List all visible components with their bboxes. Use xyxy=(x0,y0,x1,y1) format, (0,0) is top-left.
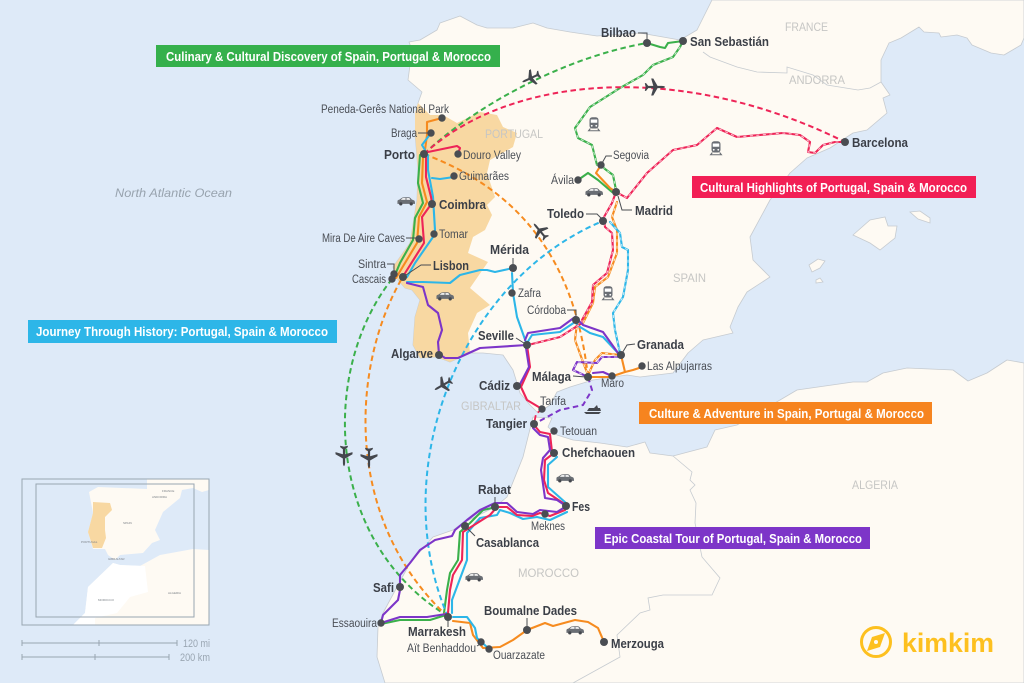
inset land xyxy=(88,479,209,560)
city labels: Fes xyxy=(572,499,590,514)
city labels: Merzouga xyxy=(611,636,665,651)
city labels: Mira De Aire Caves xyxy=(322,233,405,245)
city labels: Braga xyxy=(391,128,418,140)
city labels: Málaga xyxy=(532,369,572,384)
city labels: Porto xyxy=(384,147,415,162)
city labels: Lisbon xyxy=(433,258,469,273)
itinerary label: Cultural Highlights: Cultural Highlights of Portugal, Spain & Morocco xyxy=(700,180,967,195)
icon: planes xyxy=(336,67,665,468)
route: Epic Coastal Tour (purple) xyxy=(381,283,618,623)
country and sea labels xyxy=(115,20,898,580)
city labels: Madrid xyxy=(635,203,673,218)
itinerary label: Culture & Adventure: Culture & Adventure in Spain, Portugal & Morocco xyxy=(649,406,924,421)
city labels: Tarifa xyxy=(540,396,567,408)
inset labels: GIBRALTAR xyxy=(108,557,125,561)
inset Portugal xyxy=(88,502,112,548)
city labels: Douro Valley xyxy=(463,150,521,162)
inset labels: SPAIN xyxy=(123,521,132,525)
city labels: Algarve xyxy=(391,346,433,361)
land: Iberia and France xyxy=(393,0,1024,413)
itinerary label: Journey Through History: Journey Through History: Portugal, Spain & Morocco xyxy=(36,324,328,339)
city labels: Coimbra xyxy=(439,197,487,212)
city labels: Barcelona xyxy=(852,135,909,150)
city labels: Cádiz xyxy=(479,378,510,393)
inset labels: ANDORRA xyxy=(152,495,167,499)
city labels: Essaouira xyxy=(332,618,378,630)
Balearic islands xyxy=(809,211,930,283)
inset Morocco xyxy=(73,563,148,625)
inset labels: MOROCCO xyxy=(98,598,115,602)
scale bars: 120 mi xyxy=(183,638,210,650)
city labels: Safi xyxy=(373,580,394,595)
route: Culture & Adventure (orange) xyxy=(365,118,642,648)
itinerary label: Culture & Adventure xyxy=(639,402,932,424)
city labels: Boumalne Dades xyxy=(484,603,577,618)
city labels: Casablanca xyxy=(476,535,540,550)
city labels: Meknes xyxy=(531,521,565,533)
city labels: Chefchaouen xyxy=(562,445,635,460)
city labels: Tetouan xyxy=(560,426,597,438)
country borders xyxy=(573,52,881,683)
city markers xyxy=(377,37,849,653)
city labels: Peneda-Gerês National Park xyxy=(321,104,449,116)
route: Journey Through History (blue) xyxy=(407,133,628,648)
inset labels: PORTUGAL xyxy=(81,540,98,544)
city labels: Segovia xyxy=(613,150,650,162)
country and sea labels: North Atlantic Ocean xyxy=(115,186,232,200)
country and sea labels: SPAIN xyxy=(673,271,706,285)
city labels: Toledo xyxy=(547,206,584,221)
city labels: Guimarães xyxy=(459,171,509,183)
inset locator map xyxy=(22,479,209,625)
city labels: Ávila xyxy=(551,174,575,187)
country and sea labels: MOROCCO xyxy=(518,566,579,580)
itinerary label: Cultural Highlights xyxy=(692,176,976,198)
inset labels xyxy=(81,489,181,602)
Portugal highlighted xyxy=(393,103,517,362)
itinerary label: Epic Coastal Tour: Epic Coastal Tour of Portugal, Spain & Morocco xyxy=(604,531,862,546)
itinerary label: Culinary & Cultural Discovery xyxy=(156,45,500,67)
city labels xyxy=(321,25,909,662)
icon: cars xyxy=(397,188,603,634)
city labels: Las Alpujarras xyxy=(647,361,712,373)
city labels: Aït Benhaddou xyxy=(407,643,476,655)
city labels: Tangier xyxy=(486,416,527,431)
scale bars xyxy=(22,638,210,664)
city labels: Mérida xyxy=(490,242,530,257)
icon: trains xyxy=(589,117,721,300)
route: Cultural Highlights (red) xyxy=(402,87,845,613)
city labels: Ouarzazate xyxy=(493,650,545,662)
city labels: San Sebastián xyxy=(690,34,769,49)
scale bars: 200 km xyxy=(180,652,210,664)
country and sea labels: PORTUGAL xyxy=(485,127,543,141)
city labels: Sintra xyxy=(358,259,387,271)
land: Morocco and Algeria xyxy=(377,360,1024,683)
logo: kimkim xyxy=(862,628,994,658)
inset labels: ALGERIA xyxy=(168,591,181,595)
route: Culinary & Cultural Discovery (green) xyxy=(345,41,683,624)
country and sea labels: FRANCE xyxy=(785,20,828,34)
city labels: Marrakesh xyxy=(408,624,466,639)
city labels: Rabat xyxy=(478,482,512,497)
label leader lines xyxy=(387,33,647,646)
city labels: Granada xyxy=(637,337,685,352)
inset Africa xyxy=(73,549,209,625)
country and sea labels: ALGERIA xyxy=(852,478,898,492)
itinerary label: Journey Through History xyxy=(28,320,337,343)
inset frames xyxy=(22,479,209,625)
city labels: Cascais xyxy=(352,274,386,286)
city labels: Bilbao xyxy=(601,25,636,40)
city labels: Seville xyxy=(478,328,514,343)
itinerary label: Culinary & Cultural Discovery: Culinary & Cultural Discovery of Spain, Portugal & Morocco xyxy=(166,49,491,64)
logo: kimkim: kimkim xyxy=(902,628,994,658)
city labels: Zafra xyxy=(518,288,542,300)
city labels: Maro xyxy=(601,378,624,390)
country and sea labels: GIBRALTAR xyxy=(461,399,521,413)
city labels: Córdoba xyxy=(527,305,567,317)
country and sea labels: ANDORRA xyxy=(789,73,845,87)
inset labels: FRANCE xyxy=(162,489,174,493)
city labels: Tomar xyxy=(439,229,468,241)
icon: ferry xyxy=(584,405,601,414)
itinerary label: Epic Coastal Tour xyxy=(595,527,870,549)
